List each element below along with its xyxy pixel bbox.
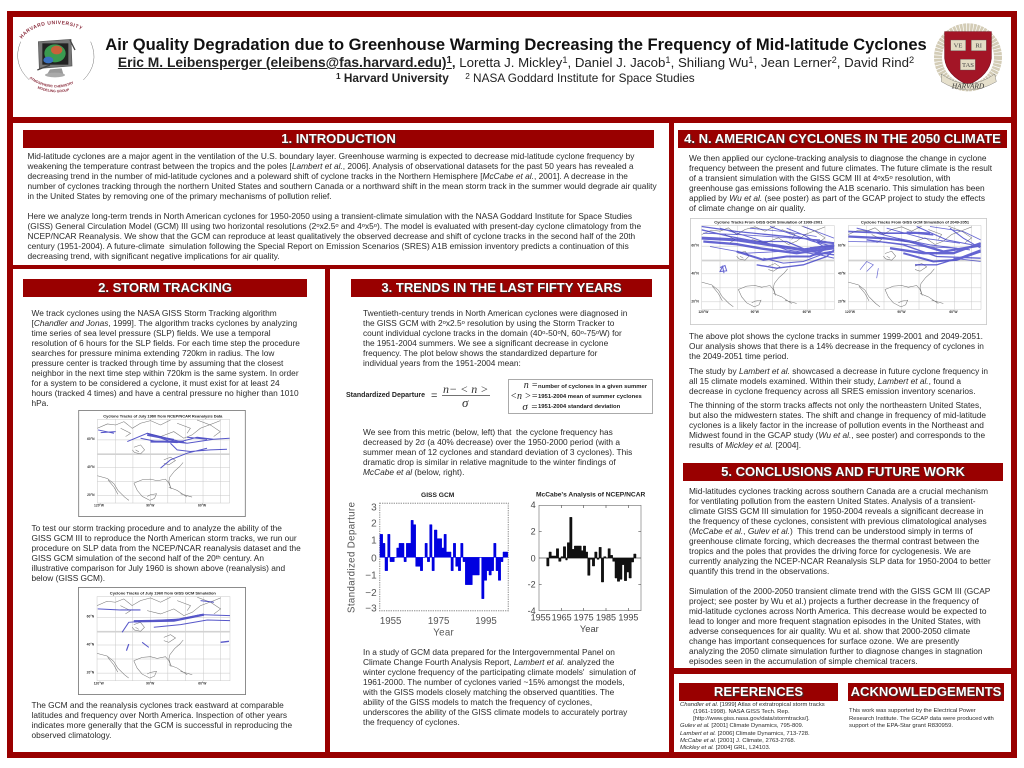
- text: conclusions: Mid-latitudes cyclones tracking across southern Canada are a crucial mechanism for ventilating pollution from the eastern United States. Analysis of a transient- climate GISS GCM III simulation for 1950-2004 reveals a significant decrease in the frequency of these cyclones, consistent with previous climatological analyses (McCabe et al., Gulev et al.) This trend can be understood simply in terms of greenhouse climate forcing, which decreases the thermal contrast between the tropics and the poles that provides the driving force for cyclogenesis. We are currently analyzing the NCEP-NCAR Reanalysis SLP data for 1950-2004 to better quantify this trend in the observations.: [689, 486, 991, 576]
- header logo: atmospheric chemistry modeling group: HARVARD UNIVERSITY: [19, 20, 83, 39]
- chart: McCabe analysis of NCEP/NCAR: 1995: [618, 613, 638, 623]
- text: 2050 method: We then applied our cyclone-tracking analysis to diagnose the change in cyclone frequency between the present and future climates. The future climate is the result of a transient simulation with the GISS GCM III at 4ox5o resolution, with greenhouse gas emissions following the A1B scenario. This simulation has been applied by Wu et al. (see poster) as part of the GCAP project to study the effects of climate change on air quality.: [689, 153, 992, 213]
- chart: McCabe analysis of NCEP/NCAR: 4: [531, 500, 536, 510]
- text: IPCC comparison: In a study of GCM data prepared for the Intergovernmental Panel on Climate Change Fourth Analysis Report, Lambert et al. analyzed the winter cyclone frequency of the participating climate models' simulation of 1961-2000. The number of cyclones varied ~15% amongst the models, with the GISS models closely matching the observed quantities. The ability of the GISS models to match the frequency of cyclones, underscores the ability of the GISS climate models to accurately portray the frequency of cyclones.: [363, 647, 636, 727]
- chart: GISS GCM standardized departure: Year: [433, 628, 455, 639]
- equation: standardized departure: Standardized Departure: [346, 392, 425, 399]
- heading: 1. introduction: [23, 130, 654, 148]
- authors: Eric M. Leibensperger (eleibens@fas.harvard.edu)1, Loretta J. Mickley1, Daniel J. Jacob1, Shiliang Wu1, Jean Lerner2, David Rind2: [118, 55, 914, 70]
- panel: introduction: [23, 130, 657, 261]
- text: lambert study: The study by Lambert et al. showcased a decrease in future cyclone frequency in all 15 climate models examined. Within their study, Lambert et al., found a decrease in cyclone frequency across all SRES emission inventory scenarios.: [689, 366, 988, 396]
- legend: equation terms: n =: [524, 380, 538, 391]
- affiliations: 1 Harvard University 2 NASA Goddard Institute for Space Studies: [336, 71, 695, 85]
- text: thinning of storm tracks: The thinning of the storm tracks affects not only the northeastern United States, but also the midwestern states. The shift and change in frequency of mid-latitude cyclones is a likely factor in the increase of pollution events in the Northeast and Midwest found in the GCAP study (Wu et al., see poster) and corresponds to the results of Mickley et al. [2004].: [689, 400, 986, 450]
- chart: GISS GCM standardized departure: 1975: [428, 616, 449, 627]
- heading: 5. conclusions and future work: [683, 463, 1003, 481]
- icon: harvard shield: VE: [954, 43, 962, 50]
- heading: 4. n. american cyclones in the 2050 climate: 4. N. AMERICAN CYCLONES IN THE 2050 CLIMATE: [684, 131, 1001, 146]
- icon: harvard shield: TAS: [962, 62, 974, 69]
- text: storm tracking method: We track cyclones using the NASA GISS Storm Tracking algorithm [Chandler and Jonas, 1999]. The algorithm tracks cyclones by analyzing time series of sea level pressure (SLP) fields. We use a temporal resolution of 6 hours for the SLP fields. For each time step the procedure searches for pressure minima extending 720km in radius. The low pressure center is tracked through time by assuming that the closest neighbor in the next time step within 720km is the same system. In order for a system to be considered a cyclone, it must exist for at least 24 hours (tracked 4 times) and have a central pressure no higher than 1010 hPa.: [32, 308, 300, 408]
- chart: GISS GCM standardized departure: −3: [365, 604, 377, 615]
- panel: trends in the last fifty years: σ: [462, 395, 469, 410]
- maps: cyclone tracks 1999-2001 vs 2049-2051: Cyclone Tracks From GISS GCM Simulation of 2049-2051: [861, 220, 970, 224]
- chart: GISS GCM standardized departure: 1: [371, 535, 377, 546]
- maps: cyclone tracks 1999-2001 vs 2049-2051: Cyclone Tracks From GISS GCM Simulation of 1999-2001: [714, 220, 823, 224]
- equation: standardized departure: [346, 382, 490, 410]
- header logo: atmospheric chemistry modeling group: MODELING GROUP: [38, 86, 70, 92]
- chart: GISS GCM standardized departure: GISS GCM: [421, 492, 455, 499]
- chart: GISS GCM standardized departure: 2: [371, 518, 377, 529]
- chart: McCabe analysis of NCEP/NCAR: 2: [531, 527, 536, 537]
- text: storm tracking comparison: To test our storm tracking procedure and to analyze the ability of the GISS GCM III to reproduce the North American storm tracks, we run our procedure on SLP data from the NCEP/NCAR reanalysis dataset and the GISS GCM simulation of the second half of the 20th century. An illustrative comparison for July 1960 is shown above (reanalysis) and below (GISS GCM).: [32, 523, 301, 583]
- heading: acknowledgements: ACKNOWLEDGEMENTS: [851, 684, 1001, 699]
- icon: harvard shield: [934, 23, 1002, 92]
- text: trends intro: Twentieth-century trends in North American cyclones were diagnosed in the GISS GCM with 2ox2.5o resolution by using the Storm Tracker to count individual cyclone tracks in the domain (40o-50oN, 60o-75oW) for the 1951-2004 summers. We see a significant decrease in cyclone frequency. The plot below shows the standardized departure for individual years from the 1951-2004 mean:: [363, 308, 627, 368]
- chart: GISS GCM standardized departure: 1995: [475, 616, 497, 627]
- chart: McCabe analysis of NCEP/NCAR: [528, 492, 646, 634]
- legend: equation terms: σ =: [522, 401, 538, 413]
- panel: references and acknowledgements: [679, 683, 1004, 751]
- legend: equation terms: <n >=: [510, 390, 538, 402]
- heading: references: [679, 683, 838, 701]
- title: Air Quality Degradation due to Greenhouse Warming Decreasing the Frequency of Mid-latitude Cyclones: [105, 35, 927, 54]
- legend: equation terms: 1951-2004 standard deviation: [538, 404, 620, 410]
- text: introduction: Mid-latitude cyclones are a major agent in the ventilation of the U.S. boundary layer. Greenhouse warming is expected to decrease mid-latitude cyclone frequency by weakening the temperature contrast between the tropics and the poles [Lambert et al., 2006]. Analysis of observational datasets for the past 50 years has revealed a decreasing trend in the number of mid-latitude cyclones and a poleward shift of cyclone tracks in the Northern Hemisphere [McCabe et al., 2001]. A decrease in the number of cyclones tracking through the northern United States and southern Canada or a northward shift in the mean storm track in the summer would degrade air quality in the United States by removing one of the primary mechanisms of pollution relief. Here we analyze long-term trends in North American cyclones for 1950-2050 using a transient-climate simulation with the NASA Goddard Institute for Space Studies (GISS) General Circulation Model (GCM) III using two horizontal resolutions (2ox2.5o and 4ox5o). The model is evaluated with present-day cyclone climatology from the NCEP/NCAR Reanalysis. We show that the GCM can reproduce at least qualitatively the observed decrease and shift of cyclone tracks in the second half of the 20th century (1951-2004). A future-climate simulation following the Special Report on Emission Scenarios (SRES) A1B emission inventory predicts a continuation of this decreasing trend, with significant negative implications for air quality.: [28, 151, 657, 261]
- heading: 2. storm tracking: [23, 279, 307, 297]
- header logo: atmospheric chemistry modeling group: [17, 20, 94, 92]
- map: GISS GCM cyclone tracks july 1960: Cyclone Tracks of July 1960 from GISS GCM Simulation: [110, 591, 216, 596]
- legend: equation terms: number of cyclones in a given summer: [538, 384, 647, 390]
- legend: equation terms: 1951-2004 mean of summer cyclones: [538, 394, 642, 400]
- chart: GISS GCM standardized departure: −2: [365, 588, 377, 599]
- text: references: Chandler et al. [1999] Atlas of extratropical storm tracks (1961-1998). NASA GISS Tech. Rep. [http://www.giss.nasa.gov/data/stormtracks/]. Gulev et al. [2001] Climate Dynamics, 795-809. Lambert et al. [2006] Climate Dynamics, 713-728. McCabe et al. [2001] J. Climate, 2763-2768. Mickley et al. [2004] GRL, L24103.: [680, 702, 825, 751]
- map: GISS GCM cyclone tracks july 1960: [78, 587, 246, 695]
- chart: GISS GCM standardized departure: [346, 492, 509, 639]
- panel: trends in the last fifty years: [346, 279, 653, 727]
- legend: equation terms: [508, 379, 653, 414]
- text: acknowledgements: This work was supported by the Electrical Power Research Institute. The GCAP data were produced with support of the EPA-Star grant R830959.: [849, 708, 994, 729]
- chart: McCabe analysis of NCEP/NCAR: -4: [528, 606, 536, 616]
- chart: McCabe analysis of NCEP/NCAR: 1955: [531, 613, 551, 623]
- heading: references: REFERENCES: [714, 684, 803, 699]
- heading: 2. storm tracking: 2. STORM TRACKING: [98, 280, 232, 295]
- chart: McCabe analysis of NCEP/NCAR: 1975: [574, 613, 594, 623]
- text: future work: Simulation of the 2000-2050 transient climate trend with the GISS GCM III (GCAP project; see poster by Wu et al.) projects a further decrease in the frequency of mid-latitude cyclones across North America. This decrease would be expected to lead to longer and more frequent stagnation episodes in the United States, with adverse consequences for air quality. Wu et al. show that 2000-2050 climate change has important consequences for surface ozone. We are presently analyzing the 2050 climate simulation further to diagnose changes in stagnation episodes seen in the accumulation of simple chemical tracers.: [689, 586, 990, 666]
- chart: McCabe analysis of NCEP/NCAR: 1985: [596, 613, 616, 623]
- text: 2050 result: The above plot shows the cyclone tracks in summer 1999-2001 and 2049-2051. Our analysis shows that there is a 14% decrease in the frequency of cyclones in the 2049-2051 time period.: [689, 331, 984, 361]
- equation: standardized departure: =: [431, 390, 437, 402]
- map: reanalysis cyclone tracks july 1960: Cyclone Tracks of July 1960 from NCEP/NCAR Reanalysis Data: [103, 413, 223, 418]
- heading: 3. trends in the last fifty years: 3. TRENDS IN THE LAST FIFTY YEARS: [381, 280, 622, 295]
- text: trends finding: We see from this metric (below, left) that the cyclone frequency has decreased by 2σ (a 40% decrease) over the 1950-2000 period (with a summer mean of 12 cyclones and standard deviation of 3 cyclones). This dramatic drop is similar in relative magnitude to the winter findings of McCabe et al (below, right).: [363, 427, 632, 477]
- chart: McCabe analysis of NCEP/NCAR: 0: [531, 553, 536, 563]
- chart: McCabe analysis of NCEP/NCAR: -2: [528, 579, 536, 589]
- heading: 1. introduction: 1. INTRODUCTION: [281, 131, 396, 146]
- heading: 3. trends in the last fifty years: [351, 279, 652, 297]
- panel: north american cyclones in 2050 and conclusions: [678, 130, 1007, 666]
- chart: GISS GCM standardized departure: 0: [371, 553, 377, 564]
- chart: GISS GCM standardized departure: 3: [371, 502, 377, 513]
- panel: storm tracking: [23, 279, 307, 740]
- icon: harvard shield: HARVARD: [951, 82, 985, 91]
- maps: cyclone tracks 1999-2001 vs 2049-2051: [690, 218, 987, 325]
- header logo: atmospheric chemistry modeling group: ATMOSPHERIC CHEMISTRY: [29, 76, 73, 88]
- chart: GISS GCM standardized departure: −1: [365, 571, 377, 582]
- chart: GISS GCM standardized departure: 1955: [380, 616, 401, 627]
- chart: McCabe analysis of NCEP/NCAR: Year: [580, 624, 599, 634]
- chart: GISS GCM standardized departure: Standardized Departure: [346, 502, 357, 613]
- icon: harvard shield: RI: [975, 43, 982, 50]
- map: reanalysis cyclone tracks july 1960: [78, 410, 246, 517]
- chart: McCabe analysis of NCEP/NCAR: McCabe's Analysis of NCEP/NCAR: [536, 492, 646, 499]
- chart: McCabe analysis of NCEP/NCAR: 1965: [552, 613, 572, 623]
- heading: 5. conclusions and future work: 5. CONCLUSIONS AND FUTURE WORK: [721, 464, 965, 479]
- panel: trends in the last fifty years: n− < n >: [443, 382, 488, 396]
- text: storm tracking result: The GCM and the reanalysis cyclones track eastward at comparable latitudes and frequency over North America. Inspection of other years indicates more generally that the GCM is successful in reproducing the observed climatology.: [32, 700, 292, 740]
